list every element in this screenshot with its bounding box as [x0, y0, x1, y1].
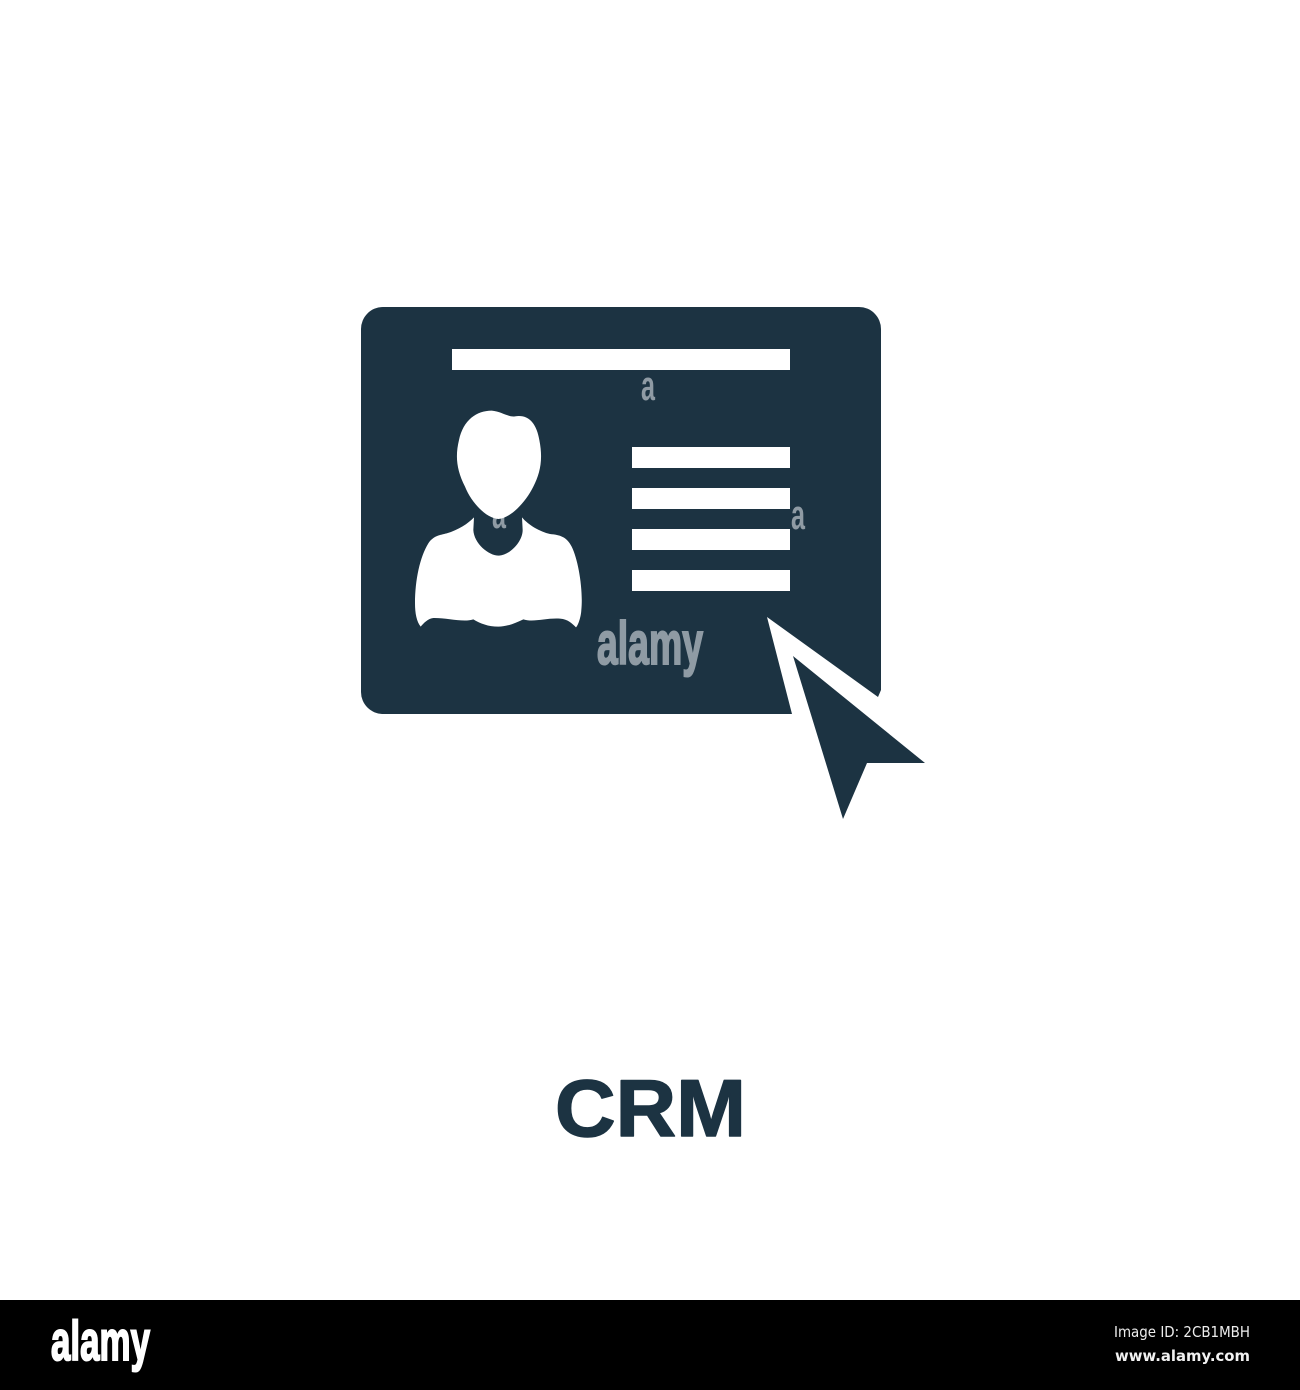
card detail lines: [632, 447, 790, 591]
watermark: small a top: a: [641, 362, 655, 409]
card panel: [361, 307, 881, 714]
watermark: alamy centre: alamy: [597, 610, 703, 677]
title: CRM: CRM: [555, 1064, 746, 1154]
footer url: www.alamy.com: [1115, 1347, 1250, 1365]
icon: cursor arrow: [793, 656, 925, 819]
footer band: [0, 1300, 1300, 1390]
footer image id: Image ID: 2CB1MBH: [1114, 1323, 1250, 1341]
watermark: small a right: a: [791, 491, 805, 538]
watermark: small a neck: a: [492, 490, 506, 537]
card title bar: [452, 349, 790, 370]
footer logo: alamy: alamy: [51, 1309, 150, 1372]
icon: CRM contact card with cursor: [361, 307, 925, 819]
icon: person silhouette: [415, 411, 582, 627]
